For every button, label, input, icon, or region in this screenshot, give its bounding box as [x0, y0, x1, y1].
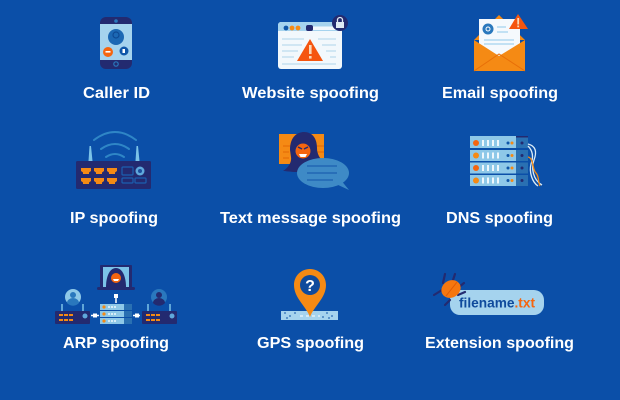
icon: DNS server rack [470, 136, 542, 186]
central server [100, 304, 132, 324]
icon: wifi router [76, 132, 151, 189]
left user and router [55, 289, 90, 324]
icon: GPS map pin: ? [305, 278, 315, 295]
laptop with hacker [97, 265, 135, 290]
label: ARP spoofing: ARP spoofing [63, 335, 169, 352]
label: GPS spoofing: GPS spoofing [257, 335, 364, 352]
label: Text message spoofing: Text message spoofing [220, 210, 401, 227]
label: DNS spoofing: DNS spoofing [446, 210, 553, 227]
label: IP spoofing: IP spoofing [70, 210, 158, 227]
label: filename.txt: filename.txt [459, 296, 536, 310]
label: Website spoofing: Website spoofing [242, 85, 379, 102]
icon: bug on filename tag [434, 274, 544, 315]
icon: browser warning [278, 15, 348, 69]
right user and router [142, 289, 177, 324]
icon: phone caller ID [100, 17, 132, 69]
label: Email spoofing: Email spoofing [442, 85, 558, 102]
label: Caller ID: Caller ID [83, 85, 150, 102]
label: Extension spoofing: Extension spoofing [425, 335, 574, 352]
connectors [91, 295, 140, 316]
icon: hacker with text bubble [279, 132, 349, 190]
icon: ARP network diagram [55, 265, 177, 324]
icon: GPS map pin [281, 269, 338, 320]
icon: email envelope [474, 14, 528, 71]
